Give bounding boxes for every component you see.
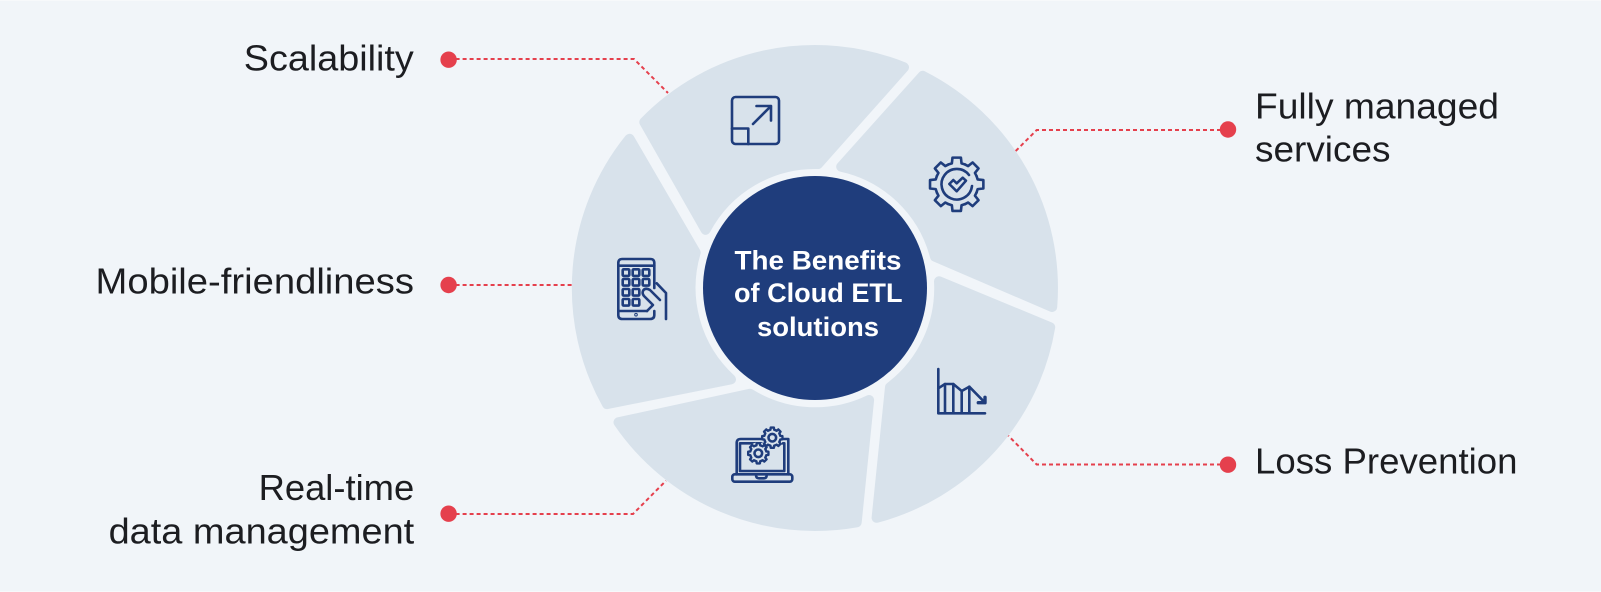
leader line (1008, 436, 1228, 464)
marker dot (440, 506, 457, 522)
callout: mobile-friendliness (96, 260, 572, 301)
leader line (449, 284, 572, 286)
marker dot (1220, 121, 1236, 138)
label: Scalability (244, 38, 414, 79)
callout: loss prevention (1008, 436, 1518, 481)
marker dot (440, 277, 457, 293)
leader line (1015, 130, 1228, 152)
segment: scalability (644, 50, 904, 230)
marker dot (440, 52, 457, 68)
icon: gear with check (930, 158, 983, 211)
title line 1: The Benefits (734, 246, 902, 276)
label: Loss Prevention (1255, 440, 1518, 481)
label line 1: Real-time (259, 467, 414, 508)
label: Mobile-friendliness (96, 260, 414, 301)
center circle with title (703, 176, 927, 400)
callout: real-time data management (109, 467, 666, 551)
icon: declining chart (938, 369, 985, 413)
title line 2: of Cloud ETL (734, 278, 902, 308)
leader line (449, 59, 668, 93)
callout: scalability (244, 38, 668, 93)
icon: mobile with hand (618, 259, 666, 319)
segment: loss prevention (877, 281, 1050, 518)
marker dot (1220, 456, 1236, 473)
label line 1: Fully managed (1255, 86, 1499, 126)
callout: fully managed services (1015, 86, 1499, 170)
segment: mobile-friendliness (577, 139, 731, 404)
leader line (449, 481, 666, 514)
label line 2: services (1255, 129, 1390, 170)
icon: laptop with gears (732, 427, 792, 482)
segment: fully managed services (841, 76, 1053, 307)
icon: scalability resize (732, 97, 779, 144)
label line 2: data management (109, 510, 414, 551)
segment: real-time data management (618, 394, 869, 526)
title line 3: solutions (757, 312, 879, 342)
